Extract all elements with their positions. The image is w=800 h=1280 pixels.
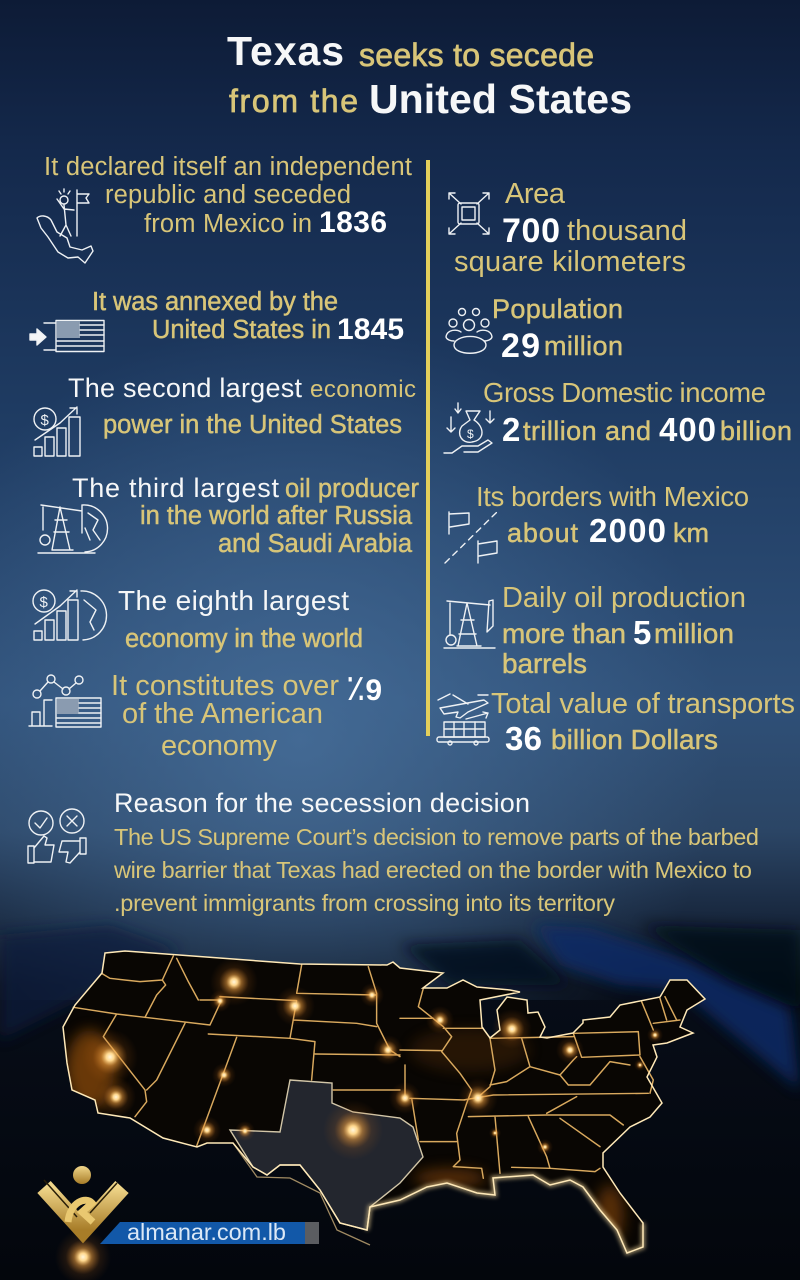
stat: population [446, 294, 623, 365]
stat: border with Mexico: km [673, 518, 709, 548]
stat: area [449, 178, 687, 278]
banner: almanar.com.lb: almanar.com.lb [127, 1219, 286, 1245]
fact: percent of American economy: of the American [122, 698, 323, 730]
stat: border with Mexico: about [507, 518, 578, 548]
title: seeks to secede [359, 37, 594, 73]
fact: percent of American economy [29, 667, 382, 762]
stat: population: 29 [501, 327, 540, 365]
stat: gross domestic income [444, 377, 792, 453]
icon: coin and rising bar chart [34, 407, 80, 456]
icon: chart and globe: $ [40, 594, 48, 611]
reason for secession block: wire barrier that Texas had erected on the border with Mexico to [113, 857, 752, 883]
fact: second largest economic power: economic [310, 376, 416, 403]
fact: second largest economic power: power in the United States [103, 411, 402, 439]
map: Texas highlighted [230, 1080, 423, 1230]
stat: population: Population [492, 294, 623, 324]
reason for secession block: The US Supreme Court’s decision to remove parts of the barbed [114, 824, 759, 850]
icon: chart and globe [33, 590, 106, 640]
icon: money bag in hand: $ [467, 427, 474, 441]
stat: daily oil production: million [654, 618, 734, 649]
stat: gross domestic income: 400 [659, 411, 716, 448]
stat: border with Mexico [445, 481, 749, 563]
icon: group of people [446, 308, 492, 353]
stat: area: square kilometers [454, 246, 686, 278]
icon: figure with flag on Mexico map [37, 189, 93, 263]
title [227, 28, 632, 122]
icon: expanding square [449, 193, 489, 234]
map: shadow outline of the Mexican border [233, 1143, 370, 1245]
map: city lights [82, 958, 663, 1160]
fact: second largest economic power [34, 373, 416, 456]
fact: eighth largest economy: economy in the world [125, 625, 363, 653]
fact: independence from Mexico [37, 153, 412, 263]
stat: gross domestic income: 2 [502, 411, 520, 448]
map: glowing Gulf and Atlantic coast [367, 1175, 643, 1253]
fact: annexed by the United States: United States in [152, 316, 331, 344]
map: state borders west [73, 956, 400, 1146]
icon: arrow into US flag [30, 320, 104, 352]
fact: third largest oil producer [38, 473, 420, 558]
stat: total value of transports: billion Dollars [551, 724, 718, 755]
stat: daily oil production: more than [502, 618, 626, 649]
stat: population: million [544, 331, 623, 361]
fact: independence from Mexico: It declared itself an independent [44, 153, 412, 181]
stat: daily oil production: 5 [633, 614, 651, 651]
icon: money bag in hand [444, 403, 494, 453]
map: state borders east [400, 988, 680, 1178]
stat: total value of transports [437, 688, 795, 757]
icon: coin and rising bar chart: $ [40, 412, 50, 429]
stat: daily oil production: barrels [502, 648, 587, 679]
icon: approve and reject thumbs [28, 809, 86, 863]
vertical divider bar [426, 160, 430, 736]
stat: daily oil production [444, 582, 746, 679]
map: United States at night [63, 951, 705, 1253]
stat: area: 700 [502, 212, 560, 250]
fact: annexed by the United States [30, 288, 404, 352]
title: United States [369, 76, 632, 122]
stat: gross domestic income: trillion and [523, 416, 651, 446]
fact: third largest oil producer: The third largest [72, 473, 279, 503]
fact: percent of American economy: It constitutes over [111, 670, 339, 702]
reason for secession block [28, 788, 759, 916]
icon: two flags across dashed border [445, 510, 499, 563]
icon: oil pump and globe [38, 505, 108, 553]
fact: third largest oil producer: and Saudi Arabia [218, 530, 413, 558]
fact: percent of American economy: economy [161, 730, 278, 762]
fact: eighth largest economy: The eighth largest [118, 585, 349, 616]
fact: third largest oil producer: in the world after Russia [140, 502, 413, 530]
stat: gross domestic income: Gross Domestic income [483, 377, 766, 408]
map: coastline [63, 951, 705, 1253]
stat: area: thousand [567, 215, 687, 247]
fact: eighth largest economy [33, 585, 363, 653]
title: from the [229, 83, 358, 119]
stat: total value of transports: Total value of transports [491, 688, 795, 720]
stat: daily oil production: Daily oil production [502, 582, 746, 614]
fact: percent of American economy: ٪9 [346, 667, 382, 708]
fact: third largest oil producer: oil producer [285, 475, 420, 503]
logo: Al-Manar emblem [44, 1166, 122, 1280]
stat: border with Mexico: 2000 [589, 512, 666, 549]
stat: border with Mexico: Its borders with Mexico [476, 481, 749, 512]
fact: annexed by the United States: It was annexed by the [92, 288, 338, 316]
stat: area: Area [505, 178, 566, 210]
fact: annexed by the United States: 1845 [337, 313, 404, 346]
reason for secession block: Reason for the secession decision [114, 788, 530, 818]
fact: independence from Mexico: from Mexico in [144, 210, 312, 238]
reason for secession block: .prevent immigrants from crossing into its territory [114, 890, 615, 916]
fact: independence from Mexico: 1836 [319, 206, 387, 239]
icon: trend line, bars and flag [29, 675, 101, 727]
fact: independence from Mexico: republic and seceded [105, 181, 351, 209]
stat: gross domestic income: billion [720, 416, 792, 446]
icon: oil pumpjack [444, 600, 495, 648]
title: Texas [227, 28, 344, 74]
icon: airplane above cargo truck [437, 694, 489, 745]
fact: second largest economic power: The second largest [68, 373, 302, 403]
stat: total value of transports: 36 [505, 720, 542, 757]
